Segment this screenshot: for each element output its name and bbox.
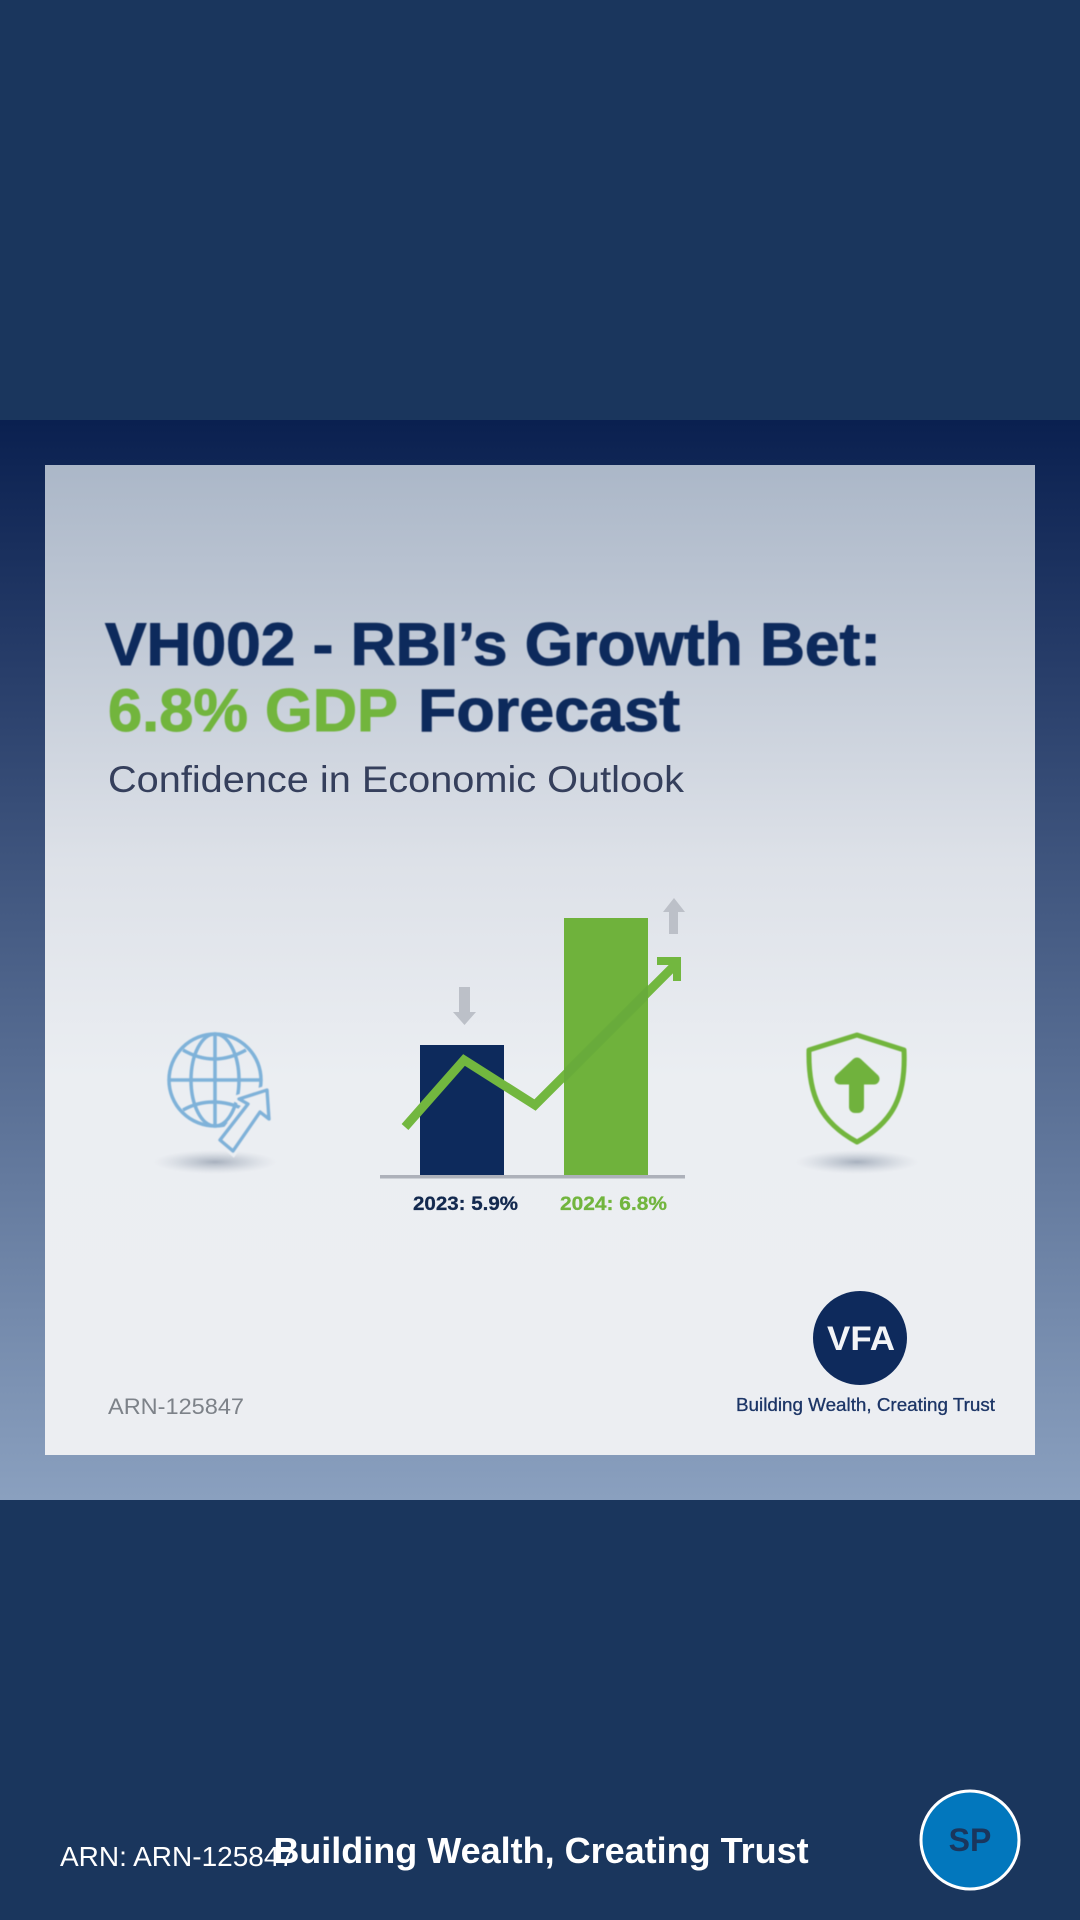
axis baseline	[380, 1175, 685, 1178]
badge: SP: SP	[949, 1822, 991, 1858]
icon: shield with up arrow	[795, 1035, 919, 1174]
panel: main card	[45, 465, 1035, 1455]
logo tagline: Building Wealth, Creating Trust	[736, 1395, 995, 1415]
title: 6.8% GDP	[108, 677, 398, 744]
label: 2023 value: 2023: 5.9%	[413, 1193, 518, 1215]
icon: globe with arrow	[153, 1034, 277, 1174]
footer ARN: ARN: ARN-125847	[60, 1841, 295, 1872]
title: Forecast	[418, 677, 680, 744]
title	[105, 611, 881, 744]
bar: 2024	[564, 918, 648, 1175]
label: 2024 value: 2024: 6.8%	[560, 1193, 667, 1215]
trend line arrow	[405, 957, 681, 1127]
title: VH002 - RBI’s Growth Bet:	[105, 611, 881, 678]
ARN code: ARN-125847	[108, 1394, 244, 1419]
subtitle: Confidence in Economic Outlook	[108, 759, 685, 800]
icon: down arrow	[453, 987, 476, 1025]
bar: 2023	[420, 1045, 504, 1175]
logo: VFA	[813, 1291, 907, 1385]
badge: SP	[921, 1791, 1019, 1889]
logo: VFA: VFA	[827, 1320, 895, 1358]
icon: up arrow	[663, 898, 685, 934]
gradient band	[0, 420, 1080, 1500]
footer tagline: Building Wealth, Creating Trust	[273, 1830, 809, 1871]
chart: GDP bars and trend line	[380, 898, 685, 1215]
